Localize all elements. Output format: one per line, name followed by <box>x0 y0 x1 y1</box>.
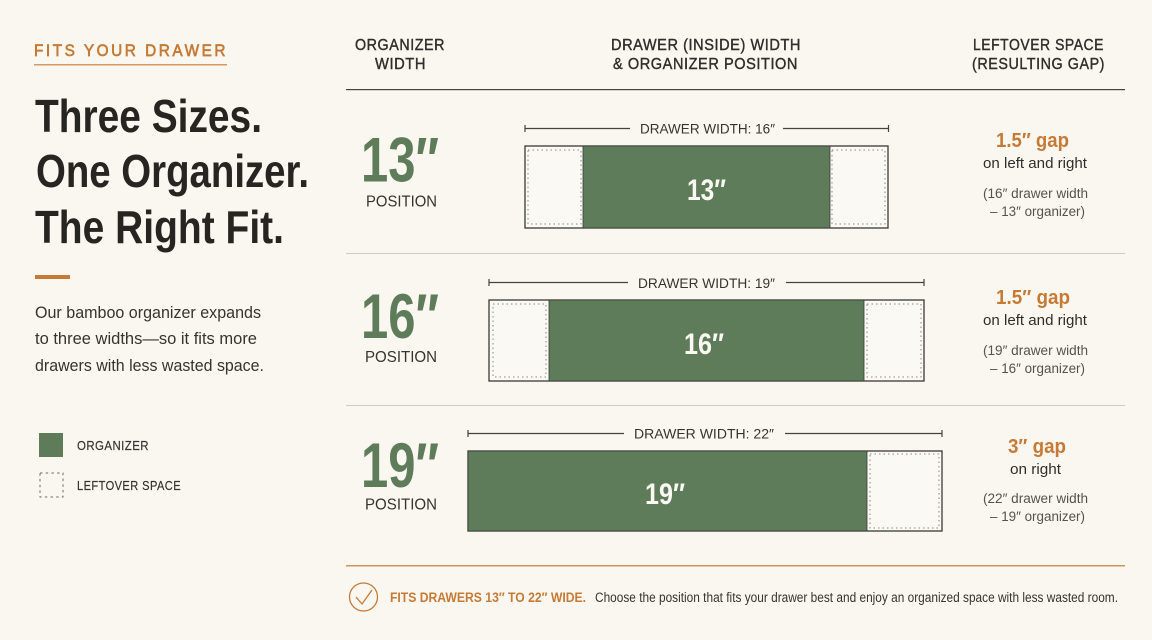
legend item: leftover space: LEFTOVER SPACE <box>77 478 181 493</box>
header: leftover space: LEFTOVER SPACE <box>973 37 1104 54</box>
drawer diagram 16 in 19: 16″ <box>684 328 724 361</box>
header: organizer width: ORGANIZER <box>355 37 445 54</box>
panel: row 13 inch <box>361 120 1088 228</box>
eyebrow label: FITS YOUR DRAWER <box>34 41 228 60</box>
title: The Right Fit. <box>35 201 284 253</box>
organizer size 16: 16″ <box>361 282 439 352</box>
header: drawer width and organizer position: & ORGANIZER POSITION <box>613 56 798 73</box>
drawer diagram 19 in 22 <box>468 451 942 531</box>
header: leftover space: (RESULTING GAP) <box>972 56 1105 73</box>
panel: row 19 inch <box>361 426 1088 531</box>
drawer diagram 16 in 19 <box>489 300 924 381</box>
organizer size 13 <box>361 126 439 210</box>
organizer size 16: POSITION <box>365 349 437 366</box>
organizer size 19 <box>361 431 439 514</box>
organizer size 16 <box>361 282 439 366</box>
intro paragraph: Our bamboo organizer expands <box>35 304 261 322</box>
gap note 13: on left and right <box>983 155 1088 172</box>
dimension line: drawer width 19 <box>489 275 924 291</box>
gap note 13: (16″ drawer width <box>983 186 1088 201</box>
intro paragraph <box>35 304 264 375</box>
dimension line: drawer width 22 <box>468 426 942 442</box>
dimension line: drawer width 16 <box>525 120 888 136</box>
panel: row 16 inch <box>361 275 1088 381</box>
header: drawer width and organizer position <box>611 37 801 73</box>
drawer diagram 13 in 16: 13″ <box>687 174 726 207</box>
gap note 19: (22″ drawer width <box>983 491 1088 506</box>
gap note 19: – 19″ organizer) <box>990 509 1085 524</box>
header: leftover space <box>972 37 1105 73</box>
drawer diagram 19 in 22: 19″ <box>645 478 685 511</box>
panel: intro column <box>34 41 309 497</box>
title: One Organizer. <box>36 145 309 197</box>
legend <box>39 433 181 497</box>
gap note 16: (19″ drawer width <box>983 343 1088 358</box>
organizer size 13: 13″ <box>361 126 439 196</box>
header: organizer width <box>355 37 445 73</box>
dimension line: drawer width 19: DRAWER WIDTH: 19″ <box>638 275 775 291</box>
dimension line: drawer width 16: DRAWER WIDTH: 16″ <box>640 120 775 136</box>
gap note 16: on left and right <box>983 312 1088 329</box>
organizer size 13: POSITION <box>366 194 437 210</box>
legend item: organizer: ORGANIZER <box>77 438 149 453</box>
organizer size 19: 19″ <box>361 431 439 501</box>
gap note 19 <box>983 436 1088 524</box>
drawer diagram 13 in 16 <box>525 146 888 228</box>
intro paragraph: drawers with less wasted space. <box>35 357 264 375</box>
dimension line: drawer width 22: DRAWER WIDTH: 22″ <box>634 426 774 442</box>
intro paragraph: to three widths—so it fits more <box>35 330 257 348</box>
column headers <box>355 37 1105 73</box>
footer callout <box>350 583 1118 611</box>
header: drawer width and organizer position: DRAWER (INSIDE) WIDTH <box>611 37 801 54</box>
icon: check circle <box>350 583 378 611</box>
footer highlight: FITS DRAWERS 13″ TO 22″ WIDE. <box>390 590 586 605</box>
gap note 13 <box>983 130 1088 219</box>
title <box>35 90 309 253</box>
legend item: organizer <box>39 433 149 457</box>
gap note 16: 1.5″ gap <box>996 287 1070 309</box>
gap note 16 <box>983 287 1088 376</box>
gap note 19: on right <box>1010 461 1062 478</box>
legend item: leftover space <box>40 473 181 497</box>
gap note 19: 3″ gap <box>1008 436 1066 458</box>
gap note 13: – 13″ organizer) <box>990 204 1085 219</box>
gap note 16: – 16″ organizer) <box>990 361 1085 376</box>
organizer size 19: POSITION <box>365 496 437 514</box>
accent bar <box>35 275 70 279</box>
gap note 13: 1.5″ gap <box>996 130 1069 152</box>
title: Three Sizes. <box>35 90 262 142</box>
header: organizer width: WIDTH <box>375 56 426 73</box>
